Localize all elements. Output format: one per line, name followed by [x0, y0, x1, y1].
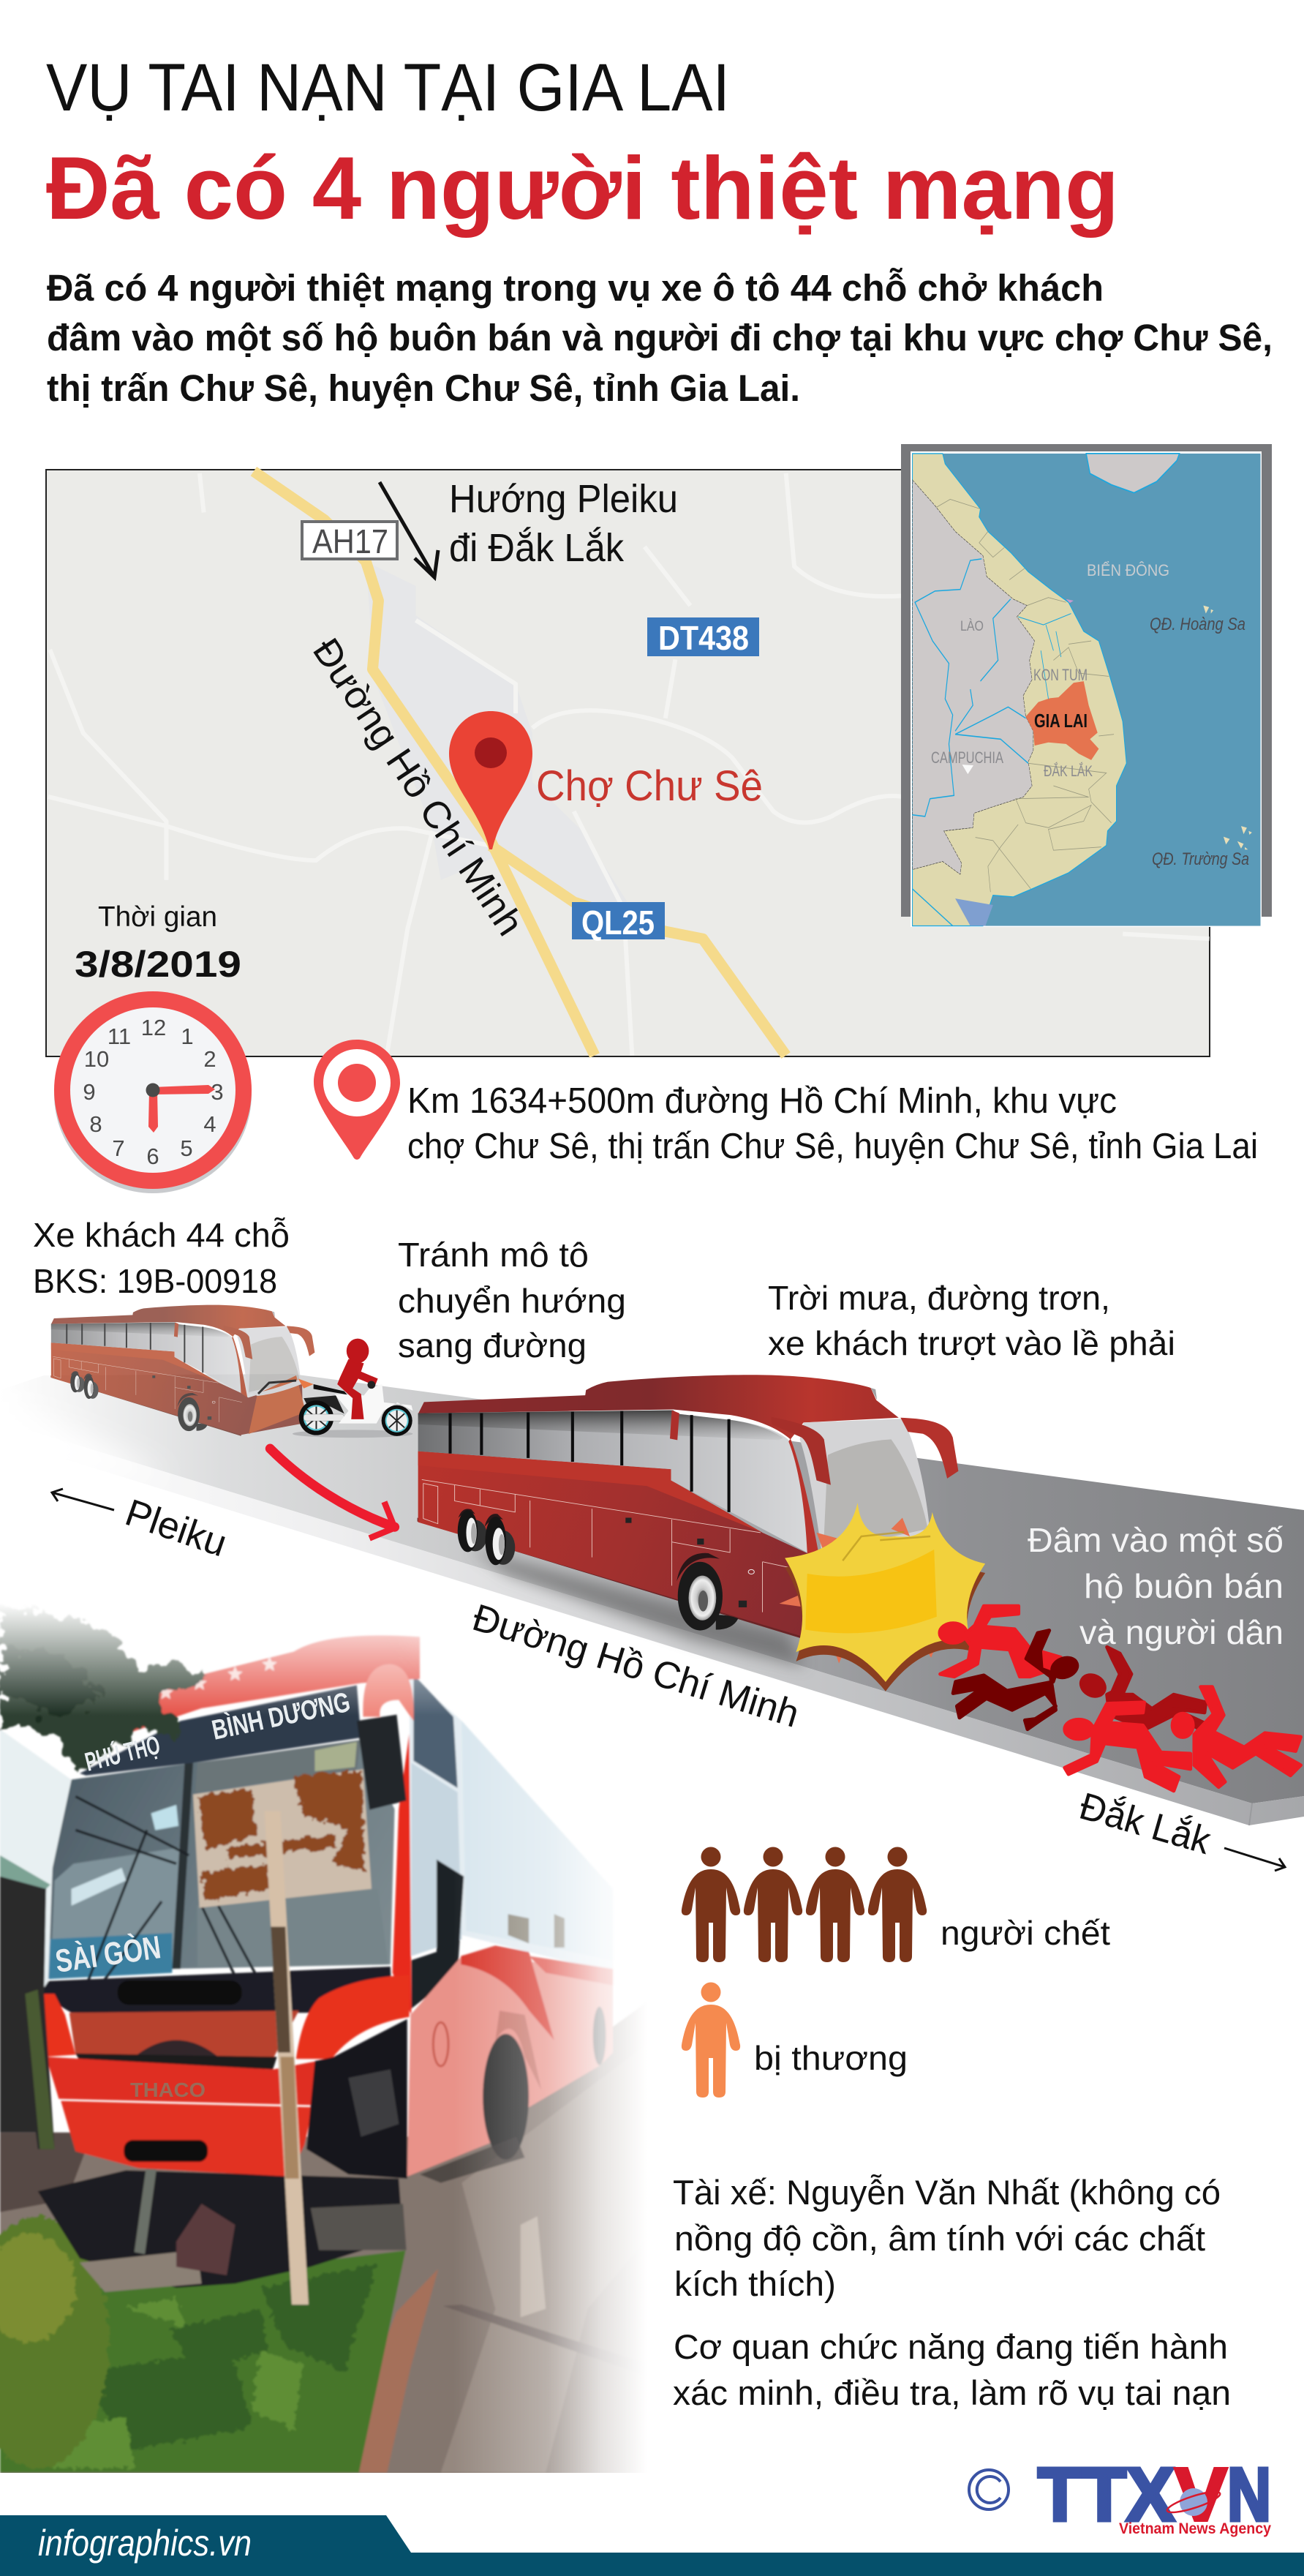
label: bus: BKS: 19B-00918 [33, 1262, 277, 1300]
icon: clock [54, 991, 252, 1193]
victim 4 [1065, 1702, 1191, 1791]
intro paragraph: đâm vào một số hộ buôn bán và người đi chợ tại khu vực chợ Chư Sê, [47, 317, 1273, 358]
icon: clock: 9 [83, 1079, 96, 1105]
inset labels: CAMPUCHIA [931, 748, 1003, 767]
logo: TTXVN: N [1227, 2452, 1271, 2536]
big bus [418, 1375, 958, 1667]
motorbike and rider [293, 1339, 412, 1438]
label: avoiding motorbike: chuyển hướng [398, 1282, 626, 1320]
investigation text: Cơ quan chức năng đang tiến hành [674, 2327, 1228, 2366]
icon: clock: 5 [180, 1135, 193, 1161]
intro paragraph: thị trấn Chư Sê, huyện Chư Sê, tỉnh Gia Lai. [47, 367, 800, 409]
label: injured: bị thương [754, 2039, 908, 2077]
road badge AH17: AH17 [312, 522, 388, 560]
label: impact: Đâm vào một số [1028, 1521, 1284, 1559]
address text: chợ Chư Sê, thị trấn Chư Sê, huyện Chư Sê, tỉnh Gia Lai [407, 1127, 1258, 1166]
icon: location pin [314, 1040, 400, 1160]
photo left shop [0, 1730, 72, 1994]
label: impact: hộ buôn bán [1084, 1567, 1284, 1605]
title: VỤ TAI NẠN TẠI GIA LAI [46, 50, 730, 125]
inset labels: ĐẮK LẮK [1044, 762, 1093, 780]
photo windshield [46, 1742, 395, 1979]
label: impact [1028, 1521, 1284, 1651]
photo wreckage [38, 2170, 403, 2288]
icon: clock: 12 [141, 1015, 166, 1040]
photo destination signs: PHÚ THỌ [82, 1729, 163, 1777]
label: road name: Đường Hồ Chí Minh [467, 1596, 804, 1736]
photo sign and pole [193, 1769, 372, 1908]
victim 2 [953, 1631, 1080, 1730]
victim 5 [1172, 1687, 1300, 1787]
icon: clock: 1 [181, 1024, 194, 1049]
victims [940, 1606, 1300, 1791]
photo destination signs: THACO [130, 2079, 206, 2101]
direction label: đi Đắk Lắk [449, 526, 625, 570]
label: avoiding motorbike: Tránh mô tô [398, 1236, 589, 1274]
driver text: kích thích) [674, 2264, 836, 2303]
victim 3 [1077, 1647, 1210, 1732]
footer bar [0, 2515, 1304, 2576]
headline: Đã có 4 người thiệt mạng [46, 138, 1119, 238]
road surface [0, 1374, 1304, 1825]
map roads [48, 471, 1209, 1056]
photo destination signs: SÀI GÒN [53, 1929, 163, 1980]
driver text [673, 2173, 1221, 2303]
date: 3/8/2019 [75, 944, 241, 985]
icon: clock: 3 [211, 1079, 224, 1105]
icons: deaths [682, 1847, 927, 1962]
investigation text [673, 2327, 1231, 2412]
label: impact: và người dân [1079, 1613, 1284, 1651]
small bus [50, 1305, 314, 1436]
road name label: Đường Hồ Chí Minh [304, 631, 532, 943]
photo mirrors [363, 1664, 414, 1721]
icon: clock: 7 [112, 1135, 125, 1161]
inset labels: BIỂN ĐÔNG [1087, 561, 1169, 579]
red arrow [270, 1449, 395, 1539]
photo destination signs [53, 1686, 353, 2101]
inset labels: GIA LAI [1034, 710, 1088, 732]
logo: TTXVN [969, 2452, 1271, 2537]
icon: clock: 10 [84, 1046, 109, 1072]
photo: crashed bus [0, 1603, 658, 2477]
driver text: nồng độ cồn, âm tính với các chất [674, 2219, 1205, 2258]
photo ground [0, 1994, 658, 2477]
logo: TTXVN: Vietnam News Agency [1119, 2520, 1271, 2537]
photo roof [132, 1634, 421, 1732]
label: Dak Lak direction: Đắk Lắk [1075, 1785, 1216, 1863]
inset labels: LÀO [960, 619, 984, 634]
intro paragraph: Đã có 4 người thiệt mạng trong vụ xe ô tô 44 chỗ chở khách [47, 267, 1104, 309]
address text [407, 1081, 1258, 1166]
explosion [780, 1503, 985, 1691]
intro paragraph [47, 267, 1273, 409]
label: Dak Lak direction [1075, 1785, 1285, 1871]
icon: clock: 6 [146, 1144, 159, 1169]
photo destination signs: BÌNH DƯƠNG [209, 1686, 353, 1746]
direction label: Hướng Pleiku [449, 477, 678, 521]
label: Pleiku direction: Pleiku [120, 1492, 232, 1566]
direction label [449, 477, 678, 570]
address text: Km 1634+500m đường Hồ Chí Minh, khu vực [407, 1081, 1117, 1121]
inset labels [931, 561, 1249, 869]
place name: Chợ Chư Sê [536, 762, 763, 810]
label: rain: Trời mưa, đường trơn, [768, 1279, 1110, 1317]
logo: TTXVN: V [1175, 2452, 1227, 2536]
photo tree [0, 1603, 206, 1771]
label: avoiding motorbike: sang đường [398, 1326, 587, 1364]
label: Pleiku direction [52, 1489, 232, 1566]
footer text: infographics.vn [38, 2523, 252, 2564]
photo grass and curb [358, 2269, 438, 2473]
icon: clock: 2 [203, 1046, 216, 1072]
inset map shapes [913, 454, 1261, 926]
time label: Thời gian [98, 901, 217, 933]
inset labels: QĐ. Hoàng Sa [1150, 615, 1245, 634]
icon: injured [682, 1983, 740, 2098]
icon: clock: 11 [108, 1024, 131, 1049]
inset labels: QĐ. Trường Sa [1152, 849, 1249, 869]
photo front frame [393, 1733, 412, 2015]
icon: clock: 4 [203, 1111, 216, 1137]
panel: inset map [901, 444, 1272, 927]
panel: road map [46, 470, 1210, 1056]
inset labels: KON TUM [1033, 666, 1088, 684]
label: deaths: người chết [941, 1914, 1110, 1952]
label: bus [33, 1216, 290, 1300]
investigation text: xác minh, điều tra, làm rõ vụ tai nạn [673, 2373, 1231, 2412]
direction arrow [380, 482, 438, 577]
label: bus: Xe khách 44 chỗ [33, 1216, 290, 1254]
photo bus side [410, 1675, 613, 1973]
victim 1 [940, 1606, 1060, 1677]
label: rain: xe khách trượt vào lề phải [768, 1324, 1175, 1362]
logo: TTXVN: TTX [1038, 2452, 1175, 2536]
road badge QL25: QL25 [581, 904, 655, 942]
label: avoiding motorbike [398, 1236, 626, 1364]
icon: clock: 8 [89, 1111, 102, 1137]
road badge DT438: DT438 [658, 619, 749, 657]
location pin [449, 711, 532, 849]
label: rain [768, 1279, 1175, 1362]
copyright mark [969, 2470, 1009, 2509]
driver text: Tài xế: Nguyễn Văn Nhất (không có [673, 2173, 1221, 2212]
